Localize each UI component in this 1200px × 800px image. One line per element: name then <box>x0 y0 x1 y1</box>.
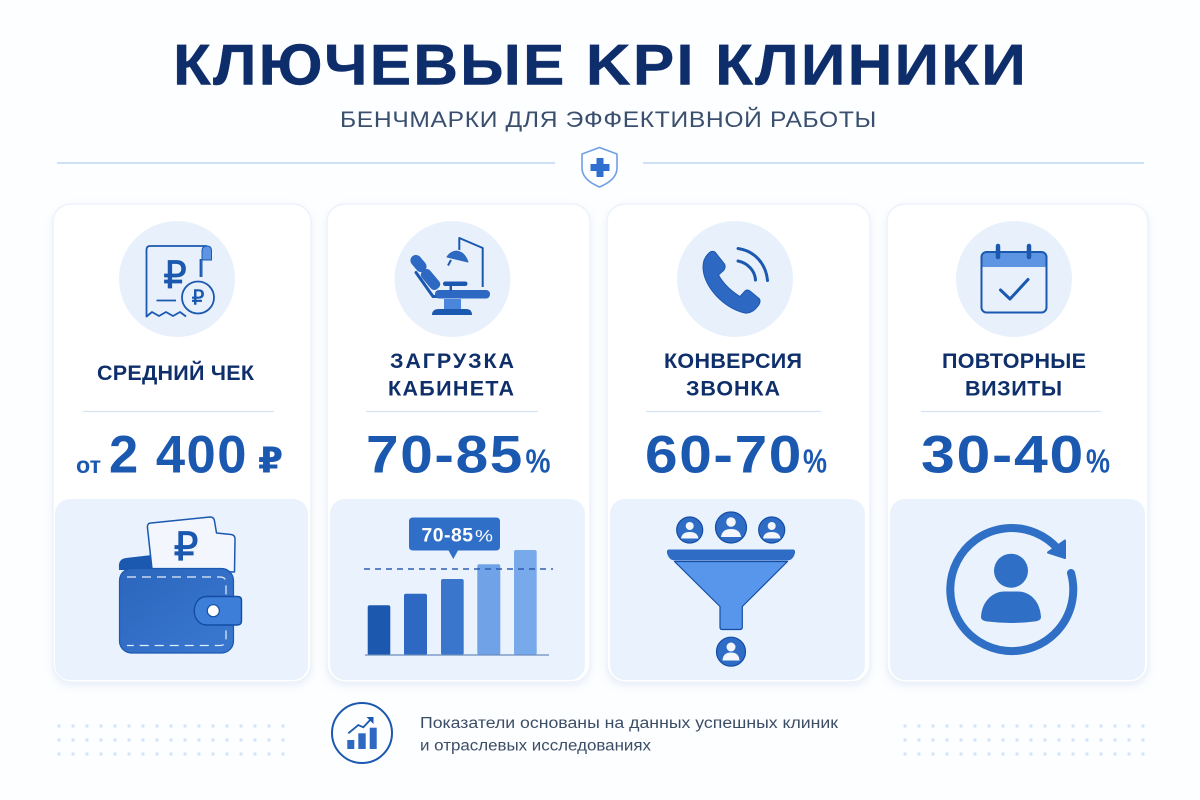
panel: средний чек <box>53 204 311 682</box>
value: % <box>1086 442 1110 480</box>
inner panel: wallet <box>55 499 308 680</box>
icon: calendar <box>956 221 1072 337</box>
value: 2 400 <box>109 426 248 484</box>
title: КЛЮЧЕВЫЕ KPI КЛИНИКИ <box>173 34 1028 98</box>
panel: конверсия звонка <box>607 204 870 682</box>
callout: 70-85 <box>422 526 474 546</box>
footer note <box>420 715 838 754</box>
panel: повторные визиты <box>887 204 1148 682</box>
value <box>76 426 283 484</box>
divider with shield <box>57 148 1144 187</box>
inner panel: returning patient <box>890 499 1145 680</box>
value: 60-70 <box>645 426 803 484</box>
bar chart <box>364 550 553 655</box>
value: % <box>803 442 827 480</box>
callout <box>409 518 500 559</box>
value: от <box>76 452 101 478</box>
heading: ПОВТОРНЫЕ <box>942 349 1086 373</box>
heading: ЗАГРУЗКА <box>390 349 514 373</box>
icon: growth chart <box>332 703 392 763</box>
icon: funnel <box>667 550 795 630</box>
heading: ЗВОНКА <box>686 376 780 400</box>
heading <box>942 349 1086 400</box>
value: ₽ <box>258 440 283 480</box>
dot pattern right <box>898 719 1150 761</box>
heading <box>664 349 802 400</box>
inner panel: bar chart <box>330 499 585 680</box>
heading: КАБИНЕТА <box>388 376 514 400</box>
callout: % <box>475 526 493 546</box>
icon: wallet <box>119 517 242 653</box>
subtitle: БЕНЧМАРКИ ДЛЯ ЭФФЕКТИВНОЙ РАБОТЫ <box>340 107 877 132</box>
icon: person in circular arrow <box>950 528 1073 651</box>
heading: ВИЗИТЫ <box>965 376 1062 400</box>
inner panel: funnel <box>610 499 865 680</box>
heading <box>388 349 514 400</box>
value: 70-85 <box>366 426 524 484</box>
heading: КОНВЕРСИЯ <box>664 349 802 373</box>
icon: people entering funnel <box>677 512 785 543</box>
footer note: Показатели основаны на данных успешных клиник <box>420 715 838 732</box>
icon: dental chair <box>394 221 510 337</box>
dot pattern left <box>52 719 290 761</box>
icon: shield with cross <box>582 148 617 187</box>
icon: receipt with ruble: ₽ <box>192 288 205 310</box>
heading: СРЕДНИЙ ЧЕК <box>97 360 255 385</box>
icon: receipt with ruble <box>119 221 235 337</box>
footer note: и отраслевых исследованиях <box>420 738 651 754</box>
icon: receipt with ruble: ₽ <box>163 255 187 296</box>
value: % <box>526 442 550 480</box>
icon: wallet: ₽ <box>174 526 198 569</box>
icon: phone <box>677 221 793 337</box>
value: 30-40 <box>921 426 1085 484</box>
panel: загрузка кабинета <box>327 204 590 682</box>
icon: converted person <box>716 637 746 666</box>
